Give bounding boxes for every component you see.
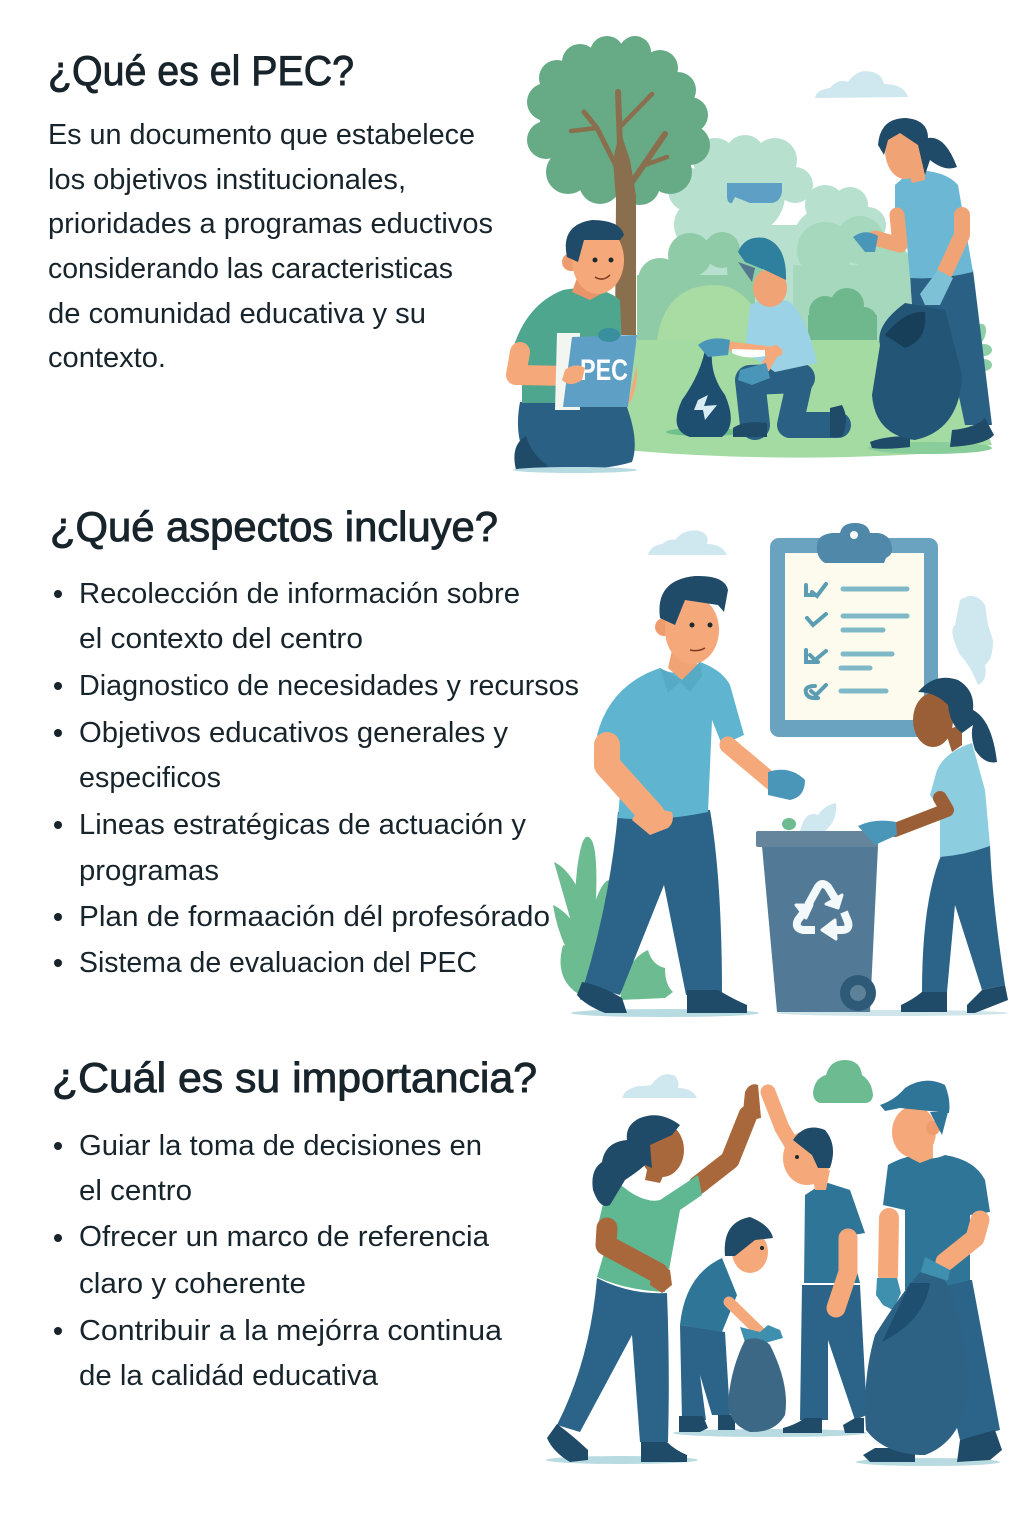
large bag: [865, 1272, 968, 1455]
person: man with cap and bag: [863, 1081, 1002, 1462]
person: girl: [858, 678, 1008, 1013]
bag with lightning mark: [666, 350, 742, 437]
bullet list: importancia: Ofrecer un marco de referencia: [79, 1221, 489, 1253]
person: man with PEC document: [512, 220, 637, 472]
bullet list: aspectos: Objetivos educativos generales y: [79, 717, 509, 749]
heading: qué aspectos incluye: ¿Qué aspectos incluye?: [50, 503, 498, 550]
bullet list: importancia: claro y coherente: [79, 1268, 306, 1300]
bullet list: aspectos: programas: [79, 855, 219, 887]
illustration: park clean-up: [512, 36, 994, 473]
heading: qué es el PEC: ¿Qué es el PEC?: [48, 47, 354, 94]
person: kneeling boy: [698, 238, 846, 437]
ground: [625, 340, 992, 458]
checklist: [806, 584, 907, 698]
leaves in bin: [782, 803, 836, 831]
plant: [553, 837, 673, 1000]
ground shadow: [513, 467, 637, 473]
recycle symbol: [796, 884, 848, 939]
ground shadow: [571, 1009, 759, 1017]
green cloud: [813, 1060, 873, 1103]
bullet list: importancia: [54, 1130, 502, 1392]
document: [555, 328, 637, 410]
panel: qué es el PEC: [48, 36, 994, 473]
heading: importancia: ¿Cuál es su importancia?: [52, 1054, 537, 1101]
floating blue object: [727, 183, 782, 203]
person: boy bending with bag: [679, 1217, 786, 1432]
cloud: [622, 1074, 697, 1098]
text block: definition: considerando las caracteristicas: [48, 253, 453, 285]
illustration: recycling: [553, 523, 1008, 1017]
bullet list: importancia: de la calidád educativa: [79, 1360, 378, 1392]
text block: definition: contexto.: [48, 342, 166, 374]
text block: definition: de comunidad educativa y su: [48, 298, 426, 330]
panel: cuál es su importancia: [52, 1054, 1002, 1466]
wheel: [840, 975, 876, 1011]
person: man: [577, 576, 805, 1013]
bullet list: aspectos: Lineas estratégicas de actuación y: [79, 809, 527, 841]
panel: qué aspectos incluye: [50, 503, 1008, 1017]
bullet list: aspectos: especificos: [79, 762, 221, 794]
background bushes: [637, 135, 913, 340]
ground shadows: [546, 1429, 1000, 1466]
bullet list: aspectos: [54, 578, 579, 979]
text block: definition: Es un documento que estabelece: [48, 119, 475, 151]
recycling bin: [756, 831, 878, 1012]
document: PEC: [580, 354, 628, 387]
text block: definition: los objetivos institucionales,: [48, 164, 406, 196]
text block: definition: [48, 119, 493, 374]
bullet list: aspectos: Sistema de evaluacion del PEC: [79, 947, 477, 979]
bullet list: importancia: el centro: [79, 1175, 192, 1207]
bullet list: aspectos: Plan de formaación dél profesórado: [79, 901, 550, 933]
person: woman with large bag: [853, 118, 994, 454]
clipboard: [770, 523, 938, 737]
plant: [967, 321, 992, 371]
illustration: team high five: [546, 1060, 1002, 1466]
person: woman high-fiving: [547, 1084, 761, 1462]
bullet list: aspectos: Diagnostico de necesidades y recursos: [79, 670, 579, 702]
bullet list: importancia: Contribuir a la mejórra continua: [79, 1315, 502, 1347]
bullet list: importancia: Guiar la toma de decisiones en: [79, 1130, 482, 1162]
cloud: [648, 530, 727, 555]
bullet list: aspectos: Recolección de información sobre: [79, 578, 520, 610]
cloud: [815, 71, 908, 98]
person: boy high-fiving: [768, 1092, 867, 1433]
small bag: [728, 1338, 786, 1432]
tree: [527, 36, 710, 335]
bullet list: aspectos: el contexto del centro: [79, 623, 363, 655]
text block: definition: prioridades a programas eductivos: [48, 208, 493, 240]
smoke cloud: [952, 596, 993, 685]
